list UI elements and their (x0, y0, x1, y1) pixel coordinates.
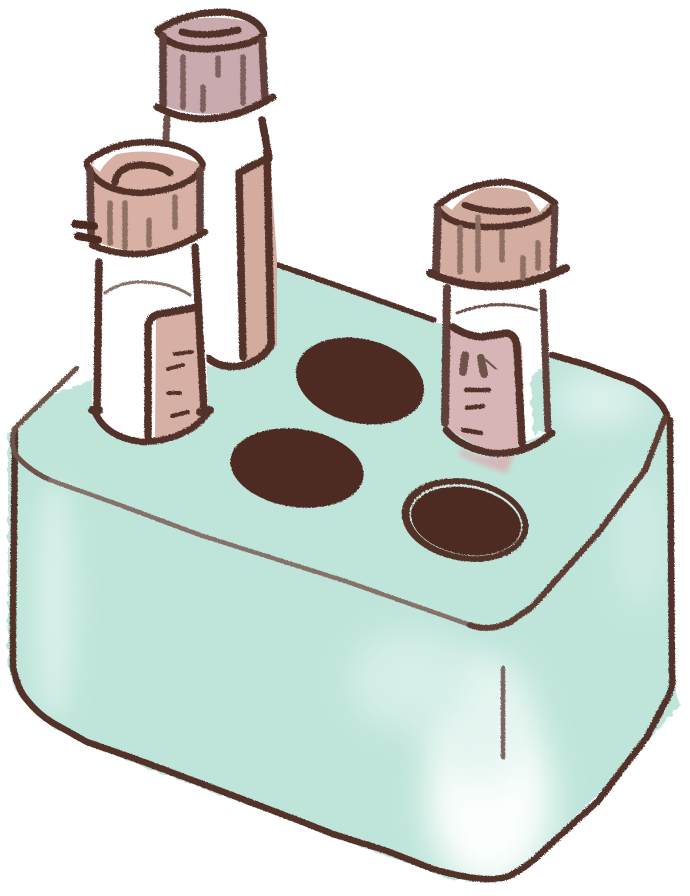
tube cap (430, 182, 566, 286)
tube liquid (155, 308, 206, 440)
hole: front left (225, 420, 369, 516)
tube glass (166, 100, 272, 369)
right tube (430, 182, 566, 473)
watercolor highlights (35, 375, 660, 890)
rack body fill (8, 266, 680, 881)
mint behind glass (530, 368, 548, 436)
tall back tube (157, 12, 277, 369)
tube glass (92, 235, 208, 442)
tube liquid (447, 327, 525, 455)
tube cap (157, 12, 273, 119)
rack block (8, 264, 680, 890)
rack holes (225, 325, 535, 571)
left tube (75, 142, 210, 442)
tube outline (166, 118, 271, 366)
hole: back (287, 325, 433, 437)
hole: front right (395, 469, 535, 571)
tube glass (445, 280, 548, 455)
tube liquid (240, 158, 277, 366)
rack outline (12, 264, 672, 879)
tube outline (445, 288, 552, 453)
tube cap (75, 142, 205, 254)
tube outline (92, 247, 210, 442)
pink shadow under tube (460, 448, 515, 473)
